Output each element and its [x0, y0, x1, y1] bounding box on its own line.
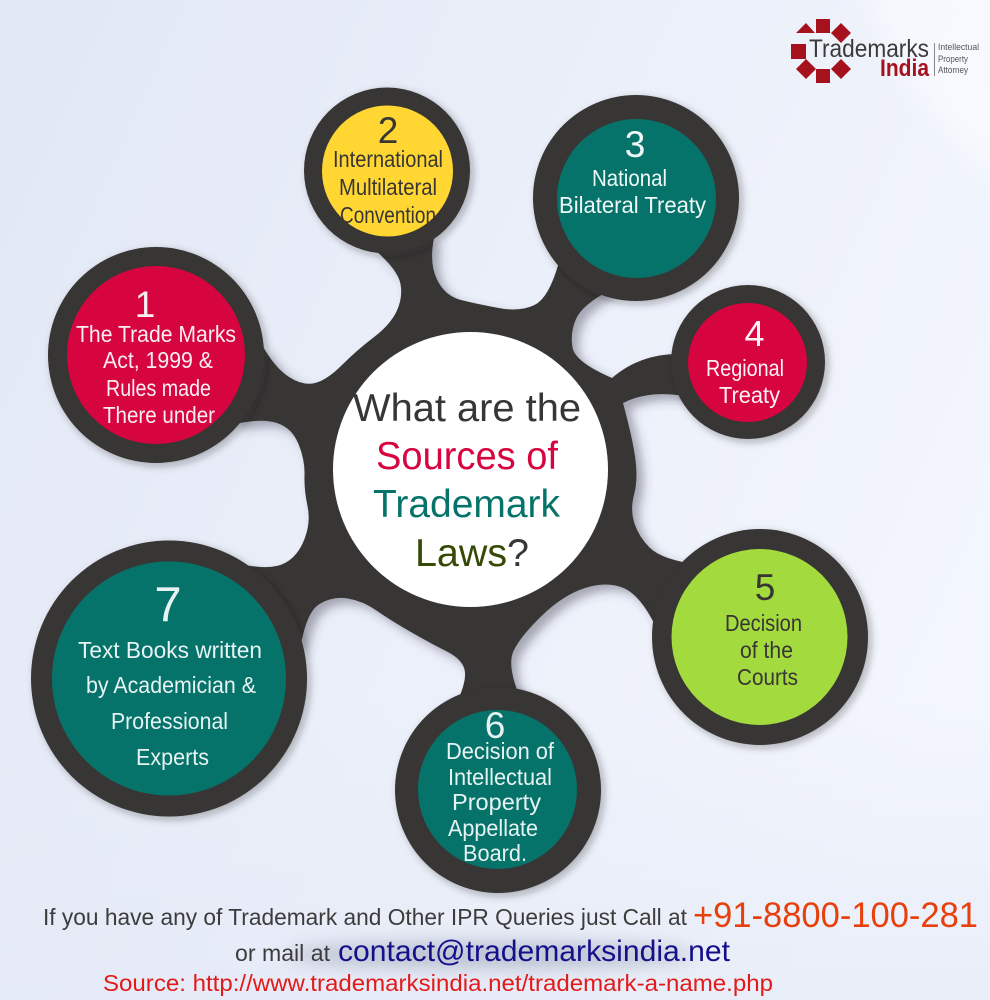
node 6: Decision of Intellectual Property Appellate Board — [395, 687, 601, 893]
centre heading line 1: What are the — [353, 387, 581, 430]
mail label: or mail at — [235, 940, 331, 966]
node 3: National Bilateral Treaty: 3 — [625, 124, 645, 165]
node 3: National Bilateral Treaty: Bilateral Treaty — [559, 192, 706, 218]
phone number: +91-8800-100-281 — [693, 896, 978, 935]
logo tagline — [938, 42, 979, 76]
node 7: Text Books written by Academician and Professional Experts: Experts — [136, 744, 209, 770]
node 2: International Multilateral Convention: Convention — [340, 202, 436, 228]
email address: contact@trademarksindia.net — [338, 935, 731, 968]
centre heading line 2: Sources of — [376, 435, 558, 478]
node 6: Decision of Intellectual Property Appellate Board: Property — [452, 789, 541, 815]
node 7: Text Books written by Academician and Professional Experts — [31, 540, 307, 816]
node 4: Regional Treaty: 4 — [744, 313, 765, 354]
footer contact text — [43, 896, 978, 996]
connector hub — [230, 230, 700, 720]
node 2: International Multilateral Convention: Multilateral — [339, 174, 437, 200]
node 3: National Bilateral Treaty — [533, 95, 739, 301]
node 5: Decision of the Courts: 5 — [755, 567, 775, 608]
node 4: Regional Treaty: Regional — [706, 355, 784, 381]
node 7: Text Books written by Academician and Professional Experts: by Academician & — [86, 672, 256, 698]
node 7: Text Books written by Academician and Professional Experts: Text Books written — [78, 637, 262, 663]
node 2: International Multilateral Convention: 2 — [378, 110, 398, 151]
centre heading line 4: Laws? — [415, 532, 529, 575]
node 6: Decision of Intellectual Property Appellate Board: Board. — [463, 840, 527, 866]
centre circle: What are the Sources of Trademark Laws? — [333, 332, 608, 607]
logo mark — [791, 19, 851, 83]
call line: If you have any of Trademark and Other IPR Queries just Call at — [43, 904, 688, 930]
logo tagline: Attorney — [938, 65, 968, 76]
node 5: Decision of the Courts — [652, 529, 868, 745]
node 1: The Trade Marks Act — [48, 247, 264, 463]
node 1: The Trade Marks Act: Act, 1999 & — [103, 347, 213, 373]
node 6: Decision of Intellectual Property Appellate Board: 6 — [485, 705, 505, 746]
node 2: International Multilateral Convention — [304, 88, 470, 254]
node 5: Decision of the Courts: of the — [740, 637, 793, 663]
logo wordmark: Trademarks — [809, 35, 929, 63]
node 1: The Trade Marks Act: The Trade Marks — [76, 321, 236, 347]
centre heading line 3: Trademark — [373, 483, 560, 526]
node 6: Decision of Intellectual Property Appellate Board: Decision of — [446, 738, 555, 764]
node 5: Decision of the Courts: Decision — [725, 610, 802, 636]
source line: Source: http://www.trademarksindia.net/trademark-a-name.php — [103, 970, 773, 996]
node 5: Decision of the Courts: Courts — [737, 664, 798, 690]
node 1: The Trade Marks Act: There under — [103, 402, 215, 428]
logo tagline: Intellectual — [938, 42, 979, 53]
node 6: Decision of Intellectual Property Appellate Board: Appellate — [448, 815, 538, 841]
logo: Trademarks India — [791, 19, 979, 83]
node 6: Decision of Intellectual Property Appellate Board: Intellectual — [448, 764, 552, 790]
node 7: Text Books written by Academician and Professional Experts: Professional — [111, 708, 228, 734]
node 4: Regional Treaty: Treaty — [719, 382, 780, 408]
logo tagline: Property — [938, 54, 968, 65]
logo: Trademarks India: India — [880, 55, 930, 82]
node 1: The Trade Marks Act: 1 — [135, 284, 155, 325]
node 7: Text Books written by Academician and Professional Experts: 7 — [154, 578, 182, 632]
node 4: Regional Treaty — [671, 285, 825, 439]
node 1: The Trade Marks Act: Rules made — [106, 375, 211, 401]
node 2: International Multilateral Convention: International — [333, 146, 443, 172]
node 3: National Bilateral Treaty: National — [592, 165, 667, 191]
